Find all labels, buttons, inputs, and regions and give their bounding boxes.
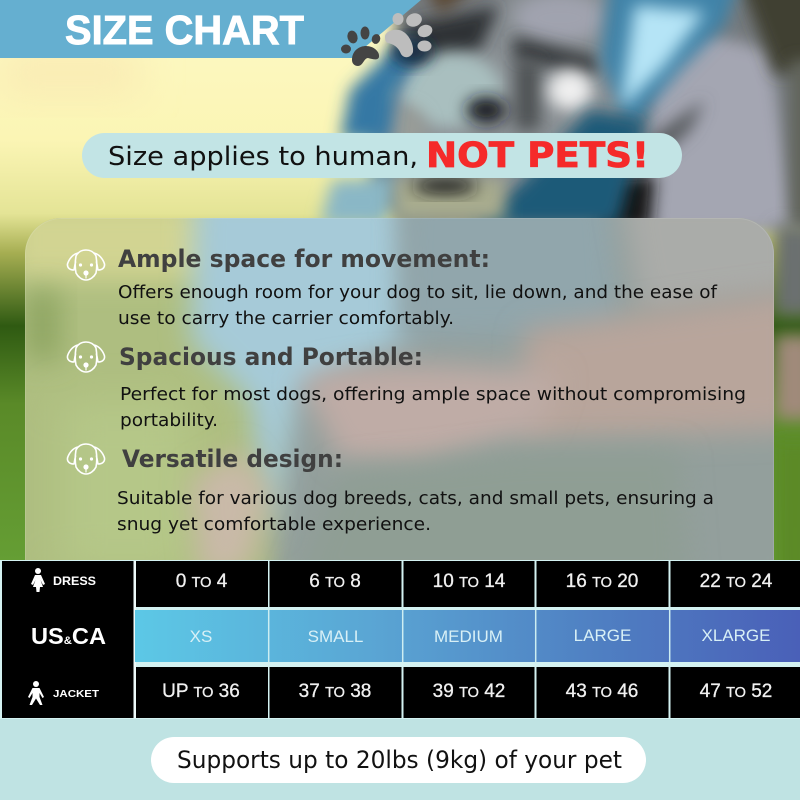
icon: dog face 3 xyxy=(67,444,105,474)
feature 2 heading: Spacious and Portable: xyxy=(119,343,423,371)
size names: LARGE xyxy=(574,626,631,645)
jacket label: JACKET xyxy=(53,688,100,700)
title: SIZE CHART xyxy=(65,7,304,53)
feature 2 body: Perfect for most dogs, offering ample space without compromising xyxy=(120,384,746,405)
feature 3 body: snug yet comfortable experience. xyxy=(117,514,431,535)
dress sizes: 10 TO 14 xyxy=(433,571,506,592)
feature 1 body xyxy=(118,282,718,329)
size chart table xyxy=(0,560,800,719)
icon: dog face 1 xyxy=(67,250,105,280)
dress label: DRESS xyxy=(53,576,96,588)
feature 2 body: portability. xyxy=(120,410,218,431)
icon: dark paw print xyxy=(341,26,382,66)
dress sizes xyxy=(176,571,773,592)
size names: MEDIUM xyxy=(434,627,503,646)
jacket sizes: 39 TO 42 xyxy=(433,681,505,702)
bottom band xyxy=(0,718,800,800)
jacket sizes: 47 TO 52 xyxy=(700,681,772,702)
jacket row xyxy=(136,667,800,718)
dress sizes: 22 TO 24 xyxy=(700,571,773,592)
dress sizes: 6 TO 8 xyxy=(309,571,361,592)
notice emphasis: NOT PETS! xyxy=(426,136,649,176)
background photo xyxy=(0,0,800,580)
icon: man xyxy=(28,681,44,705)
feature 1 body: use to carry the carrier comfortably. xyxy=(118,308,454,329)
size names: XS xyxy=(190,627,212,646)
feature 1 heading: Ample space for movement: xyxy=(118,245,490,273)
dress row xyxy=(136,561,800,607)
dress sizes: 0 TO 4 xyxy=(176,571,228,592)
us and ca label: US&CA xyxy=(31,623,106,649)
jacket sizes xyxy=(162,681,772,702)
header banner xyxy=(0,0,421,58)
size names: SMALL xyxy=(308,627,363,646)
jacket sizes: 43 TO 46 xyxy=(566,681,638,702)
dress sizes: 16 TO 20 xyxy=(566,571,638,592)
feature 1 body: Offers enough room for your dog to sit, lie down, and the ease of xyxy=(118,282,718,303)
feature 2 body xyxy=(120,384,746,431)
feature 3 heading: Versatile design: xyxy=(122,445,343,473)
size names xyxy=(190,626,770,646)
size names: XLARGE xyxy=(702,626,770,645)
frosted text panel xyxy=(25,218,774,560)
capacity pill xyxy=(151,737,646,783)
jacket sizes: UP TO 36 xyxy=(162,681,240,702)
icon: light paw print xyxy=(385,11,434,57)
icon: dog face 2 xyxy=(67,342,105,372)
size row xyxy=(135,610,800,662)
capacity text: Supports up to 20lbs (9kg) of your pet xyxy=(177,746,622,774)
notice pill xyxy=(82,133,682,178)
feature 3 body xyxy=(117,488,714,535)
icon: woman xyxy=(31,568,45,592)
jacket sizes: 37 TO 38 xyxy=(299,681,371,702)
feature 3 body: Suitable for various dog breeds, cats, and small pets, ensuring a xyxy=(117,488,714,509)
notice text: Size applies to human, xyxy=(108,142,418,172)
